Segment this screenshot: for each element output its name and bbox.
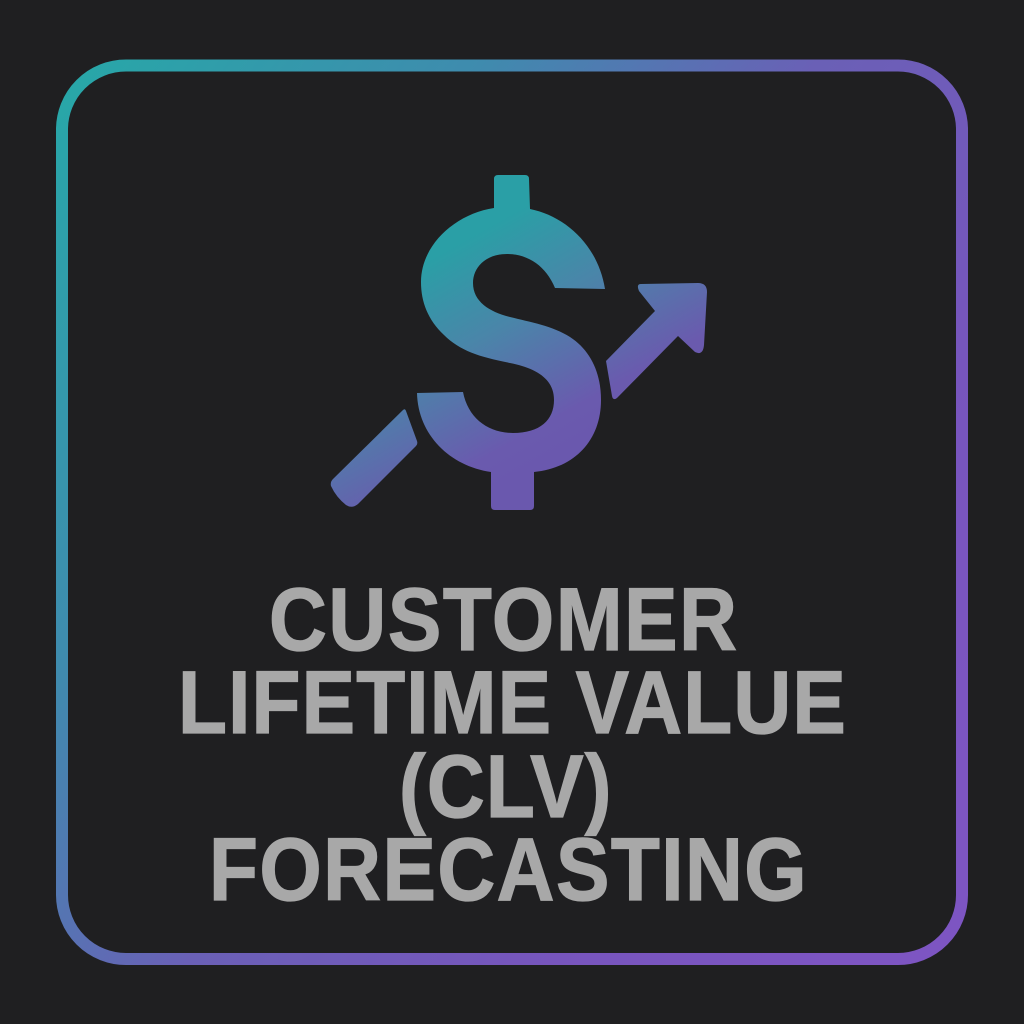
title line 2: LIFETIME VALUE xyxy=(178,652,846,752)
icon: dollar sign xyxy=(417,175,605,510)
title line 4: FORECASTING xyxy=(209,819,807,919)
title line 3: (CLV) xyxy=(399,736,611,836)
title xyxy=(178,569,846,919)
rounded gradient frame xyxy=(62,66,962,959)
arrow: tail segment xyxy=(331,409,417,507)
arrow: head segment xyxy=(606,283,707,399)
icon: dollar sign with rising arrow xyxy=(331,175,707,510)
title line 1: CUSTOMER xyxy=(269,569,737,669)
